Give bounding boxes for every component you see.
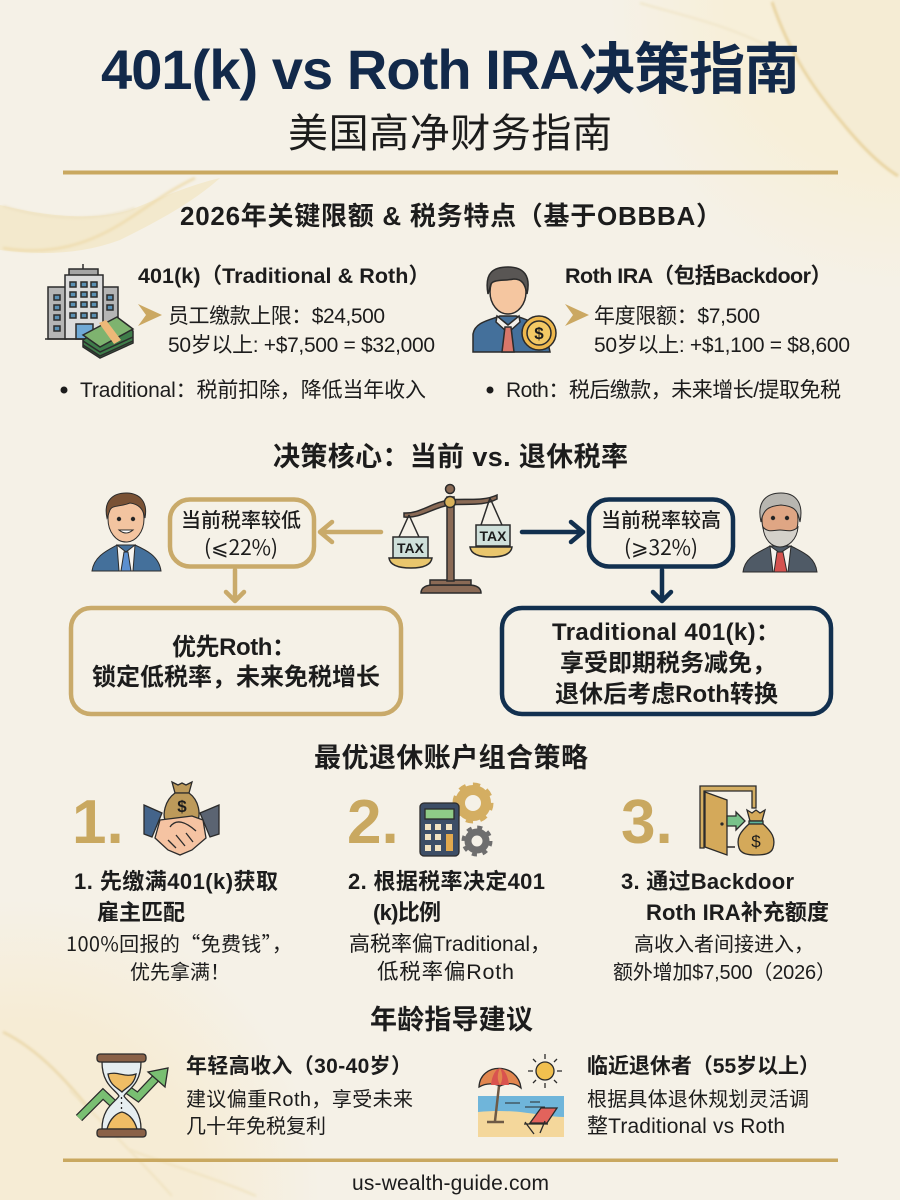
- arrow: navy down: [653, 570, 671, 601]
- icon: handshake with money bag: [144, 782, 219, 855]
- box: traditional 401(k): Traditional 401(k)：: [552, 619, 780, 646]
- text: step 3 heading: [621, 869, 829, 925]
- step 3: [613, 786, 836, 984]
- heading: decision core: 决策核心：当前 vs. 退休税率: [273, 442, 628, 472]
- text: young earners advice: 建议偏重Roth，享受未来: [186, 1088, 413, 1111]
- arrow: to higher rate: [522, 522, 583, 542]
- heading: age guidance: 年龄指导建议: [370, 1005, 533, 1035]
- arrow: to lower rate: [320, 522, 381, 542]
- heading: Roth IRA: Roth IRA（包括Backdoor）: [565, 264, 832, 288]
- text: step 1 note: 优先拿满！: [130, 960, 230, 984]
- text: Roth limits: 年度限额：$7,500: [594, 305, 760, 328]
- text: step 3 note: [613, 933, 836, 984]
- text: Roth limits: [594, 305, 850, 357]
- text: step 2 heading: (k)比例: [373, 900, 441, 925]
- footer: us-wealth-guide.com: [352, 1172, 549, 1195]
- text: step 2 heading: [348, 869, 545, 925]
- text: near retirees heading: 临近退休者（55岁以上）: [587, 1055, 820, 1078]
- box: prefer Roth: 优先Roth：: [172, 634, 296, 661]
- icon: person with coin: $: [534, 324, 544, 343]
- box: prefer Roth: [71, 608, 401, 714]
- panel: 2026 limits: [45, 201, 850, 402]
- text: step 3 note: 高收入者间接进入，: [634, 933, 814, 956]
- panel: optimal strategy: [66, 743, 836, 984]
- number 2: 2.: [347, 788, 399, 857]
- icon: tax scales: [389, 484, 512, 593]
- icon: person with coin: [473, 267, 556, 352]
- icon: door with money bag: $: [751, 832, 761, 851]
- text: step 3 heading: 3. 通过Backdoor: [621, 869, 794, 894]
- arrow: gold down: [226, 570, 244, 601]
- arrow: gold pointer: [565, 304, 589, 326]
- box: lower current rate: 当前税率较低: [181, 509, 301, 532]
- panel: Roth IRA column: [473, 264, 850, 402]
- box: lower current rate: [170, 500, 314, 566]
- icon: door with money bag: [700, 786, 774, 855]
- text: Roth bullet: Roth：税后缴款，未来增长/提取免税: [506, 379, 841, 402]
- icon: beach scene: [478, 1054, 564, 1137]
- heading: optimal strategy: 最优退休账户组合策略: [314, 743, 588, 773]
- text: young earners advice: [186, 1088, 413, 1138]
- number 1: 1.: [72, 788, 124, 857]
- arrow: gold pointer: [138, 304, 162, 326]
- icon: young man: [92, 493, 161, 571]
- text: step 2 note: 低税率偏Roth: [377, 960, 514, 984]
- panel: decision core: [71, 442, 831, 714]
- box: traditional 401(k): 退休后考虑Roth转换: [555, 681, 778, 708]
- panel: age guidance: [79, 1005, 820, 1138]
- text: step 2 heading: 2. 根据税率决定401: [348, 869, 545, 894]
- icon: office building with cash: [45, 264, 133, 358]
- panel: young earners: [79, 1054, 413, 1138]
- text: step 1 heading: 1. 先缴满401(k)获取: [74, 869, 278, 894]
- icon: older man: [743, 493, 817, 572]
- subtitle: 美国高净财务指南: [288, 112, 612, 156]
- box: lower current rate: (⩽22%): [204, 532, 278, 562]
- panel: near retirees: [478, 1054, 820, 1138]
- box: prefer Roth: 锁定低税率，未来免税增长: [92, 664, 380, 691]
- text: near retirees advice: 根据具体退休规划灵活调: [587, 1088, 809, 1111]
- text: step 2 note: [349, 933, 551, 984]
- text: step 1 note: 100%回报的“免费钱”，: [66, 928, 292, 957]
- icon: tax scales: TAX: [397, 540, 425, 556]
- icon: tax scales: TAX: [480, 528, 507, 544]
- panel: 401(k) column: [45, 264, 435, 402]
- heading: 401(k): 401(k)（Traditional & Roth）: [138, 264, 430, 288]
- box: higher current rate: 当前税率较高: [601, 509, 721, 532]
- text: step 3 note: 额外增加$7,500（2026）: [613, 961, 836, 984]
- box: traditional 401(k): [502, 608, 831, 714]
- text: young earners heading: 年轻高收入（30-40岁）: [186, 1054, 412, 1078]
- text: step 2 note: 高税率偏Traditional，: [349, 933, 551, 956]
- title: 401(k) vs Roth IRA决策指南: [101, 38, 800, 101]
- text: Roth limits: 50岁以上: +$1,100 = $8,600: [594, 334, 850, 357]
- text: step 1 note: [66, 928, 292, 984]
- icon: handshake with money bag: $: [177, 797, 187, 816]
- text: step 1 heading: [74, 869, 278, 925]
- text: 401(k) limits: [168, 305, 435, 357]
- icon: calculator with gears: [420, 785, 491, 856]
- box: higher current rate: [589, 500, 733, 566]
- text: 401(k) limits: 50岁以上: +$7,500 = $32,000: [168, 334, 435, 357]
- text: step 3 heading: Roth IRA补充额度: [646, 900, 829, 925]
- text: near retirees advice: 整Traditional vs Roth: [587, 1115, 785, 1138]
- number 3: 3.: [621, 788, 673, 857]
- text: traditional bullet: Traditional：税前扣除，降低当年收入: [80, 379, 426, 402]
- text: young earners advice: 几十年免税复利: [186, 1115, 326, 1138]
- text: 401(k) limits: 员工缴款上限：$24,500: [168, 305, 385, 328]
- box: higher current rate: (⩾32%): [624, 532, 698, 562]
- heading: 2026 limits: 2026年关键限额 & 税务特点（基于OBBBA）: [180, 201, 722, 231]
- box: traditional 401(k): 享受即期税务减免，: [560, 650, 776, 677]
- step 1: [66, 782, 292, 984]
- text: near retirees advice: [587, 1088, 809, 1138]
- icon: hourglass with rising arrow: [79, 1054, 168, 1137]
- text: step 1 heading: 雇主匹配: [97, 900, 185, 925]
- step 2: [347, 785, 551, 984]
